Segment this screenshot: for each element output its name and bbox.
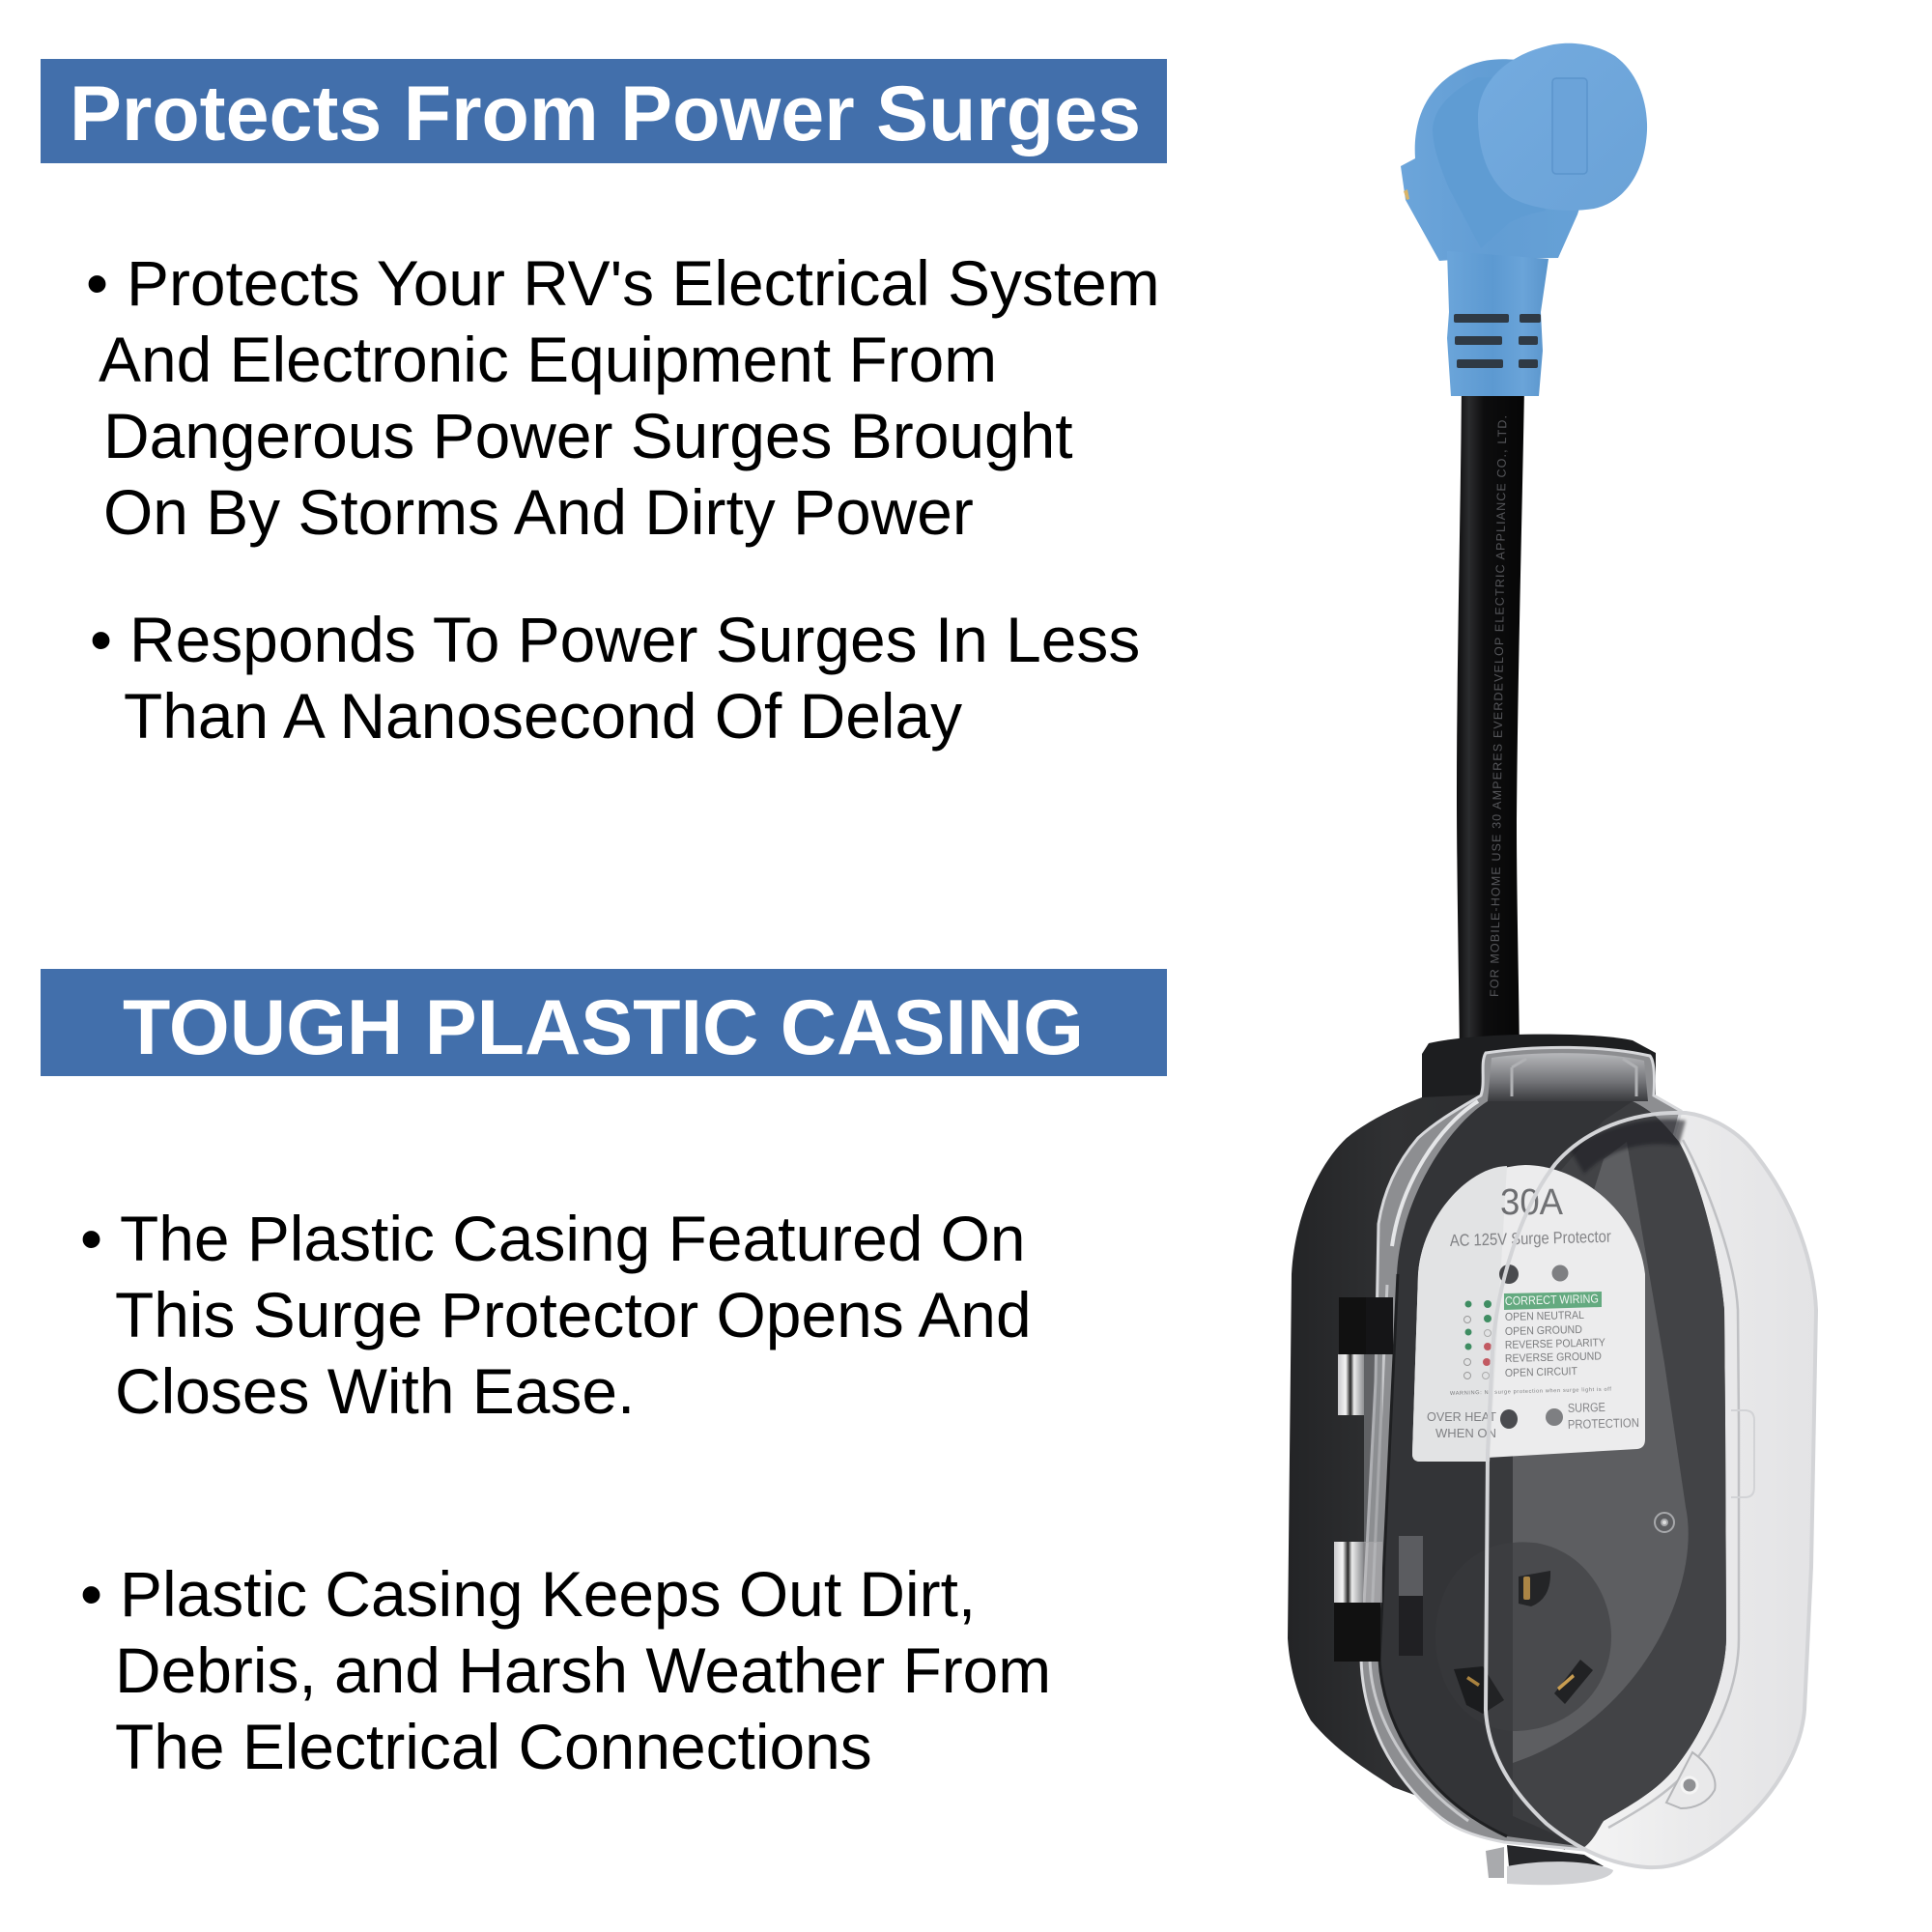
wiring status table: REVERSE POLARITY — [1505, 1337, 1605, 1351]
text block: casing opens bullet: • — [80, 1203, 102, 1274]
text block: casing opens bullet: This Surge Protector Opens And — [115, 1279, 1032, 1350]
text block: surge protection bullet: Protects Your RV's Electrical System — [127, 247, 1160, 319]
text block: casing opens bullet — [80, 1203, 1032, 1427]
text block: surge protection bullet: • — [86, 247, 108, 319]
casing top block — [1422, 1035, 1656, 1121]
black housing body — [1288, 1092, 1642, 1850]
right face wedge — [1513, 1101, 1726, 1847]
text block: casing protection bullet: • — [80, 1558, 102, 1630]
product illustration: RV surge protector — [1288, 43, 1816, 1885]
status label panel: WHEN ON — [1435, 1426, 1496, 1440]
text block: surge protection bullet: On By Storms And Dirty Power — [103, 476, 974, 548]
wiring status table — [1464, 1292, 1605, 1379]
icon: blue angled plug — [1401, 43, 1647, 396]
lid side tab — [1731, 1410, 1754, 1497]
text block: surge protection bullet: And Electronic Equipment From — [99, 324, 997, 395]
text block: response time bullet: Than A Nanosecond Of Delay — [124, 680, 962, 752]
power cable — [1457, 386, 1524, 1058]
text block: casing protection bullet: The Electrical Connections — [115, 1711, 872, 1782]
top hinge — [1338, 1297, 1393, 1543]
wiring status table: OPEN CIRCUIT — [1505, 1366, 1577, 1379]
plug head cap — [1478, 43, 1647, 211]
status label panel: PROTECTION — [1568, 1415, 1639, 1432]
heading banner: Tough Plastic Casing — [41, 969, 1167, 1076]
lighter plate behind socket — [1513, 1142, 1689, 1763]
status label panel: AC 125V Surge Protector — [1450, 1227, 1611, 1250]
heading banner: Protects From Power Surges: Protects From Power Surges — [70, 71, 1141, 157]
text block: casing protection bullet — [80, 1558, 1051, 1782]
text block: casing protection bullet: Plastic Casing Keeps Out Dirt, — [120, 1558, 976, 1630]
base rim highlight — [1370, 1101, 1507, 1836]
text block: casing protection bullet: Debris, and Harsh Weather From — [115, 1634, 1051, 1706]
text block: response time bullet — [90, 604, 1140, 752]
front clear lid — [1486, 1113, 1816, 1867]
status label panel: WARNING: No surge protection when surge light is off — [1450, 1387, 1611, 1397]
text block: surge protection bullet — [86, 247, 1160, 548]
outlet socket — [1435, 1542, 1611, 1731]
wiring status table: CORRECT WIRING — [1505, 1292, 1599, 1308]
mounting screw — [1655, 1513, 1674, 1532]
text block: casing opens bullet: The Plastic Casing Featured On — [120, 1203, 1026, 1274]
wiring status table: REVERSE GROUND — [1505, 1350, 1602, 1365]
power cable: FOR MOBILE-HOME USE 30 AMPERES EVERDEVELOP ELECTRIC APPLIANCE CO., LTD. — [1488, 415, 1509, 997]
clear lid backing — [1547, 1113, 1816, 1867]
bottom hinge — [1334, 1536, 1423, 1662]
lid latch tab — [1666, 1752, 1716, 1808]
status label panel — [1412, 1165, 1645, 1462]
text block: response time bullet: Responds To Power Surges In Less — [129, 604, 1140, 675]
status label panel: SURGE — [1568, 1400, 1605, 1415]
text block: response time bullet: • — [90, 604, 112, 675]
strain relief ribs — [1454, 314, 1541, 368]
status label panel: 30A — [1500, 1182, 1564, 1223]
face panel of surge protector — [1378, 1101, 1726, 1847]
text block: casing opens bullet: Closes With Ease. — [115, 1355, 635, 1427]
heading banner: Tough Plastic Casing: TOUGH PLASTIC CASING — [123, 984, 1084, 1071]
bottom tab — [1486, 1845, 1613, 1885]
text block: surge protection bullet: Dangerous Power Surges Brought — [103, 400, 1073, 471]
clear base cover with top cap — [1361, 1047, 1681, 1850]
status label panel: OVER HEAT — [1427, 1409, 1496, 1424]
wiring status table: OPEN NEUTRAL — [1505, 1310, 1585, 1323]
wiring status table: OPEN GROUND — [1505, 1324, 1582, 1338]
